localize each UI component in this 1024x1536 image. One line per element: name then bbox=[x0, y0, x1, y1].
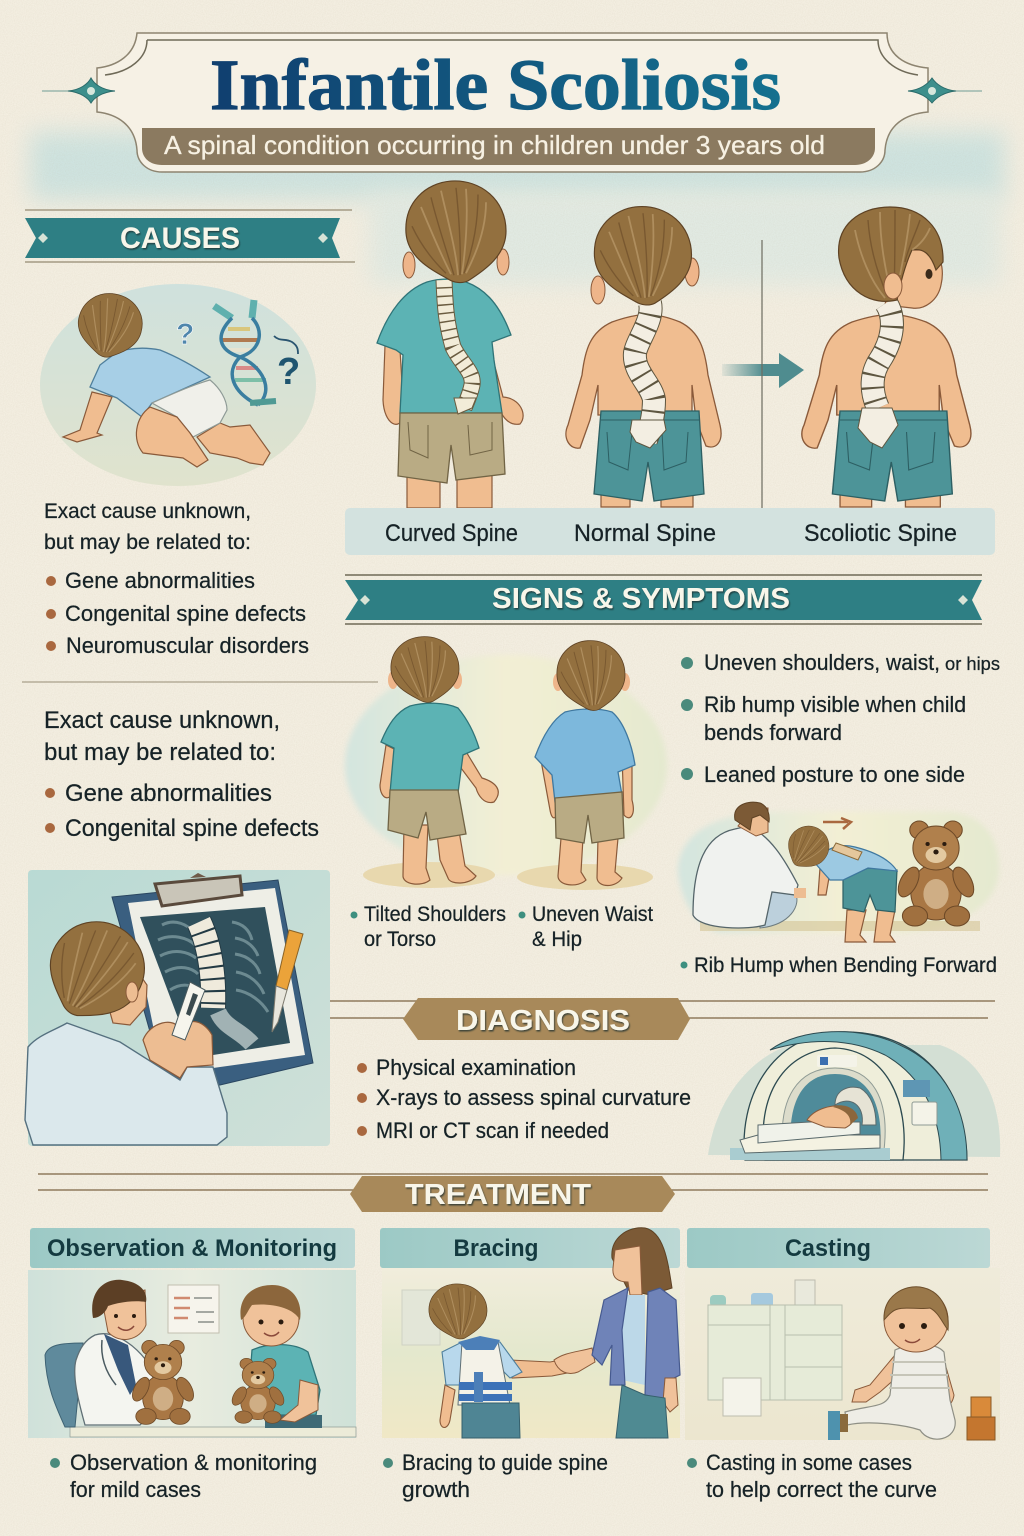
text block: symptoms list bbox=[681, 650, 1000, 787]
patient bed bbox=[730, 1148, 890, 1160]
arrow bbox=[722, 353, 804, 388]
text block: treatment descriptions: Bracing to guide spine bbox=[402, 1450, 608, 1475]
teddy bear bbox=[894, 821, 978, 926]
text block: posture captions: or Torso bbox=[364, 928, 436, 951]
baby bbox=[63, 287, 270, 467]
child right bbox=[535, 641, 635, 886]
text block: treatment descriptions bbox=[50, 1450, 937, 1502]
text block: causes list repeated: but may be related to: bbox=[44, 739, 276, 766]
clip bbox=[155, 876, 242, 906]
text block: causes list: Neuromuscular disorders bbox=[66, 633, 309, 658]
text block: rib hump caption: Rib Hump when Bending Forward bbox=[694, 954, 997, 977]
caption strip: spine labels: Scoliotic Spine bbox=[804, 520, 957, 547]
header: Casting bbox=[785, 1235, 871, 1262]
illustration: curved spine child in shirt bbox=[377, 181, 523, 508]
question marks: ? bbox=[176, 318, 194, 351]
child left bbox=[380, 637, 498, 884]
caption strip: spine labels: Curved Spine bbox=[385, 520, 518, 547]
clipboard bbox=[112, 880, 313, 1085]
illustration: MRI scanner bbox=[708, 1032, 1000, 1160]
header: Observation & Monitoring bbox=[47, 1235, 337, 1262]
text block: posture captions: & Hip bbox=[532, 928, 582, 951]
boy with brace bbox=[429, 1284, 572, 1438]
doctor bbox=[108, 965, 147, 1025]
panel: observation and monitoring bbox=[28, 1228, 356, 1438]
illustration: crawling baby and DNA bbox=[40, 284, 316, 486]
panel: casting bbox=[685, 1228, 1000, 1440]
boy bbox=[240, 1285, 322, 1428]
mother bbox=[554, 1228, 680, 1438]
heading: causes: CAUSES bbox=[120, 222, 240, 255]
heading: treatment: TREATMENT bbox=[405, 1179, 591, 1211]
illustration: normal spine child bbox=[566, 207, 721, 507]
text block: diagnosis list: X-rays to assess spinal curvature bbox=[376, 1085, 691, 1110]
text block: causes list repeated bbox=[44, 707, 319, 842]
text block: causes list: but may be related to: bbox=[44, 531, 251, 554]
x-ray spine bbox=[199, 922, 213, 1008]
text block: causes list: Gene abnormalities bbox=[65, 568, 255, 593]
examiner bbox=[693, 802, 806, 928]
teddy bear bbox=[229, 1358, 287, 1423]
pencil bbox=[272, 930, 303, 1032]
teddy bear bbox=[129, 1340, 197, 1424]
doctor bbox=[75, 1280, 160, 1425]
icon: right ornament bbox=[908, 78, 982, 103]
text block: symptoms list: Leaned posture to one side bbox=[704, 762, 965, 787]
heading: signs and symptoms bbox=[345, 575, 982, 624]
header bbox=[380, 1228, 680, 1268]
text block: treatment descriptions: Observation & monitoring bbox=[70, 1450, 317, 1475]
text block: treatment descriptions: to help correct the curve bbox=[706, 1477, 937, 1502]
caption strip: spine labels: Normal Spine bbox=[574, 520, 716, 547]
text block: treatment descriptions: growth bbox=[402, 1477, 470, 1502]
heading: diagnosis bbox=[330, 998, 995, 1040]
illustration: scoliotic spine child bbox=[802, 207, 971, 507]
panel: bracing bbox=[380, 1228, 680, 1438]
baby bbox=[828, 1287, 955, 1440]
text block: diagnosis list bbox=[357, 1055, 691, 1143]
soft background blob bbox=[40, 284, 316, 486]
header: Bracing bbox=[454, 1235, 538, 1262]
text block: symptoms list: Rib hump visible when child bbox=[704, 692, 966, 717]
text block: causes list: Exact cause unknown, bbox=[44, 500, 251, 523]
illustration: crawling baby and DNA: ? bbox=[277, 351, 300, 393]
text block: posture captions: Tilted Shoulders bbox=[364, 903, 506, 926]
heading: diagnosis: DIAGNOSIS bbox=[456, 1005, 630, 1037]
toy blocks bbox=[967, 1397, 995, 1440]
text block: treatment descriptions: Casting in some cases bbox=[706, 1450, 912, 1475]
illustration: doctor reading x-ray bbox=[25, 870, 330, 1146]
header bbox=[687, 1228, 990, 1268]
face bbox=[885, 250, 942, 308]
small arrow bbox=[823, 818, 851, 829]
caption strip: spine labels bbox=[345, 508, 995, 555]
text block: symptoms list: bends forward bbox=[704, 720, 842, 745]
text block: posture captions: Uneven Waist bbox=[532, 903, 653, 926]
icon: left ornament bbox=[42, 78, 115, 103]
illustration: forward bend test bbox=[678, 802, 999, 942]
heading: treatment bbox=[38, 1174, 988, 1212]
text block: causes list: Congenital spine defects bbox=[65, 601, 306, 626]
cabinet bbox=[708, 1280, 842, 1416]
text block: causes list repeated: Congenital spine defects bbox=[65, 815, 319, 842]
title: Infantile Scoliosis bbox=[210, 45, 781, 125]
text block: causes list repeated: Exact cause unknown, bbox=[44, 707, 280, 734]
text block: symptoms list: Uneven shoulders, waist, bbox=[704, 650, 940, 675]
text block: causes list repeated: Gene abnormalities bbox=[65, 780, 272, 807]
ruler bbox=[172, 982, 205, 1040]
heading: signs and symptoms: SIGNS & SYMPTOMS bbox=[492, 583, 790, 615]
chair bbox=[45, 1343, 83, 1427]
title plaque bbox=[97, 33, 928, 172]
text block: diagnosis list: MRI or CT scan if needed bbox=[376, 1118, 609, 1143]
text block: treatment descriptions: for mild cases bbox=[70, 1477, 201, 1502]
text block: diagnosis list: Physical examination bbox=[376, 1055, 576, 1080]
x-ray film bbox=[140, 907, 290, 1055]
heading: causes bbox=[25, 210, 355, 262]
x-ray ribs bbox=[158, 922, 268, 1012]
subtitle bar: A spinal condition occurring in children under 3 years old bbox=[164, 130, 825, 160]
icon: DNA helix bbox=[214, 300, 276, 405]
text block: posture captions bbox=[350, 903, 653, 951]
illustration: tilted shoulders and uneven waist children bbox=[345, 637, 667, 890]
text block: symptoms list: or hips bbox=[945, 654, 1000, 674]
header bbox=[30, 1228, 355, 1268]
text block: causes list bbox=[44, 500, 309, 658]
bending child bbox=[778, 818, 897, 942]
